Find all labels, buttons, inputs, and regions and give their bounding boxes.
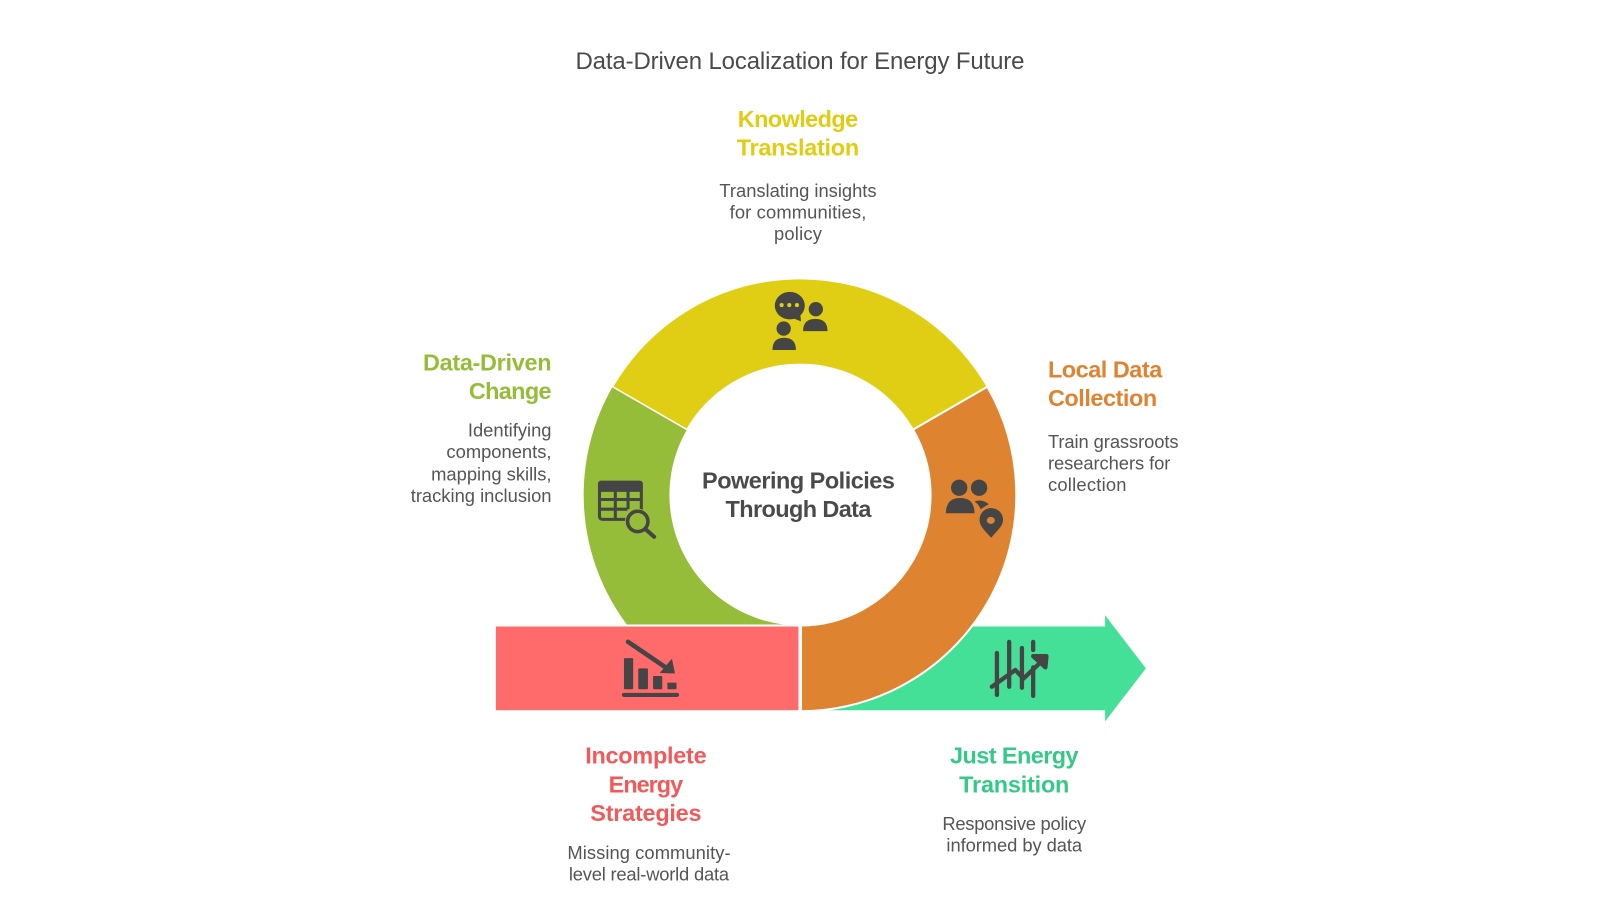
text: just energy transition (942, 742, 1087, 856)
text: incomplete energy strategies: Incomplete (585, 742, 707, 768)
text: local data collection (1048, 357, 1179, 495)
text: knowledge translation (719, 106, 877, 244)
text: just energy transition: Just Energy (950, 742, 1079, 768)
icon: table with magnifier (598, 481, 654, 537)
icon: rising chart (992, 642, 1046, 696)
text: local data collection: collection (1048, 474, 1127, 495)
ring segment: data-driven change (584, 387, 800, 711)
title: Data-Driven Localization for Energy Future (576, 48, 1024, 75)
text: just energy transition: Responsive policy (942, 813, 1087, 834)
text: data-driven change: Identifying (468, 420, 552, 441)
bar: incomplete energy strategies (449, 624, 801, 716)
text: incomplete energy strategies: Missing community- (567, 842, 731, 863)
text: just energy transition: informed by data (946, 835, 1083, 856)
text: just energy transition: Transition (959, 771, 1069, 797)
center label: Powering Policies (702, 467, 895, 493)
icon: people with location pin (946, 480, 1003, 538)
text: local data collection: researchers for (1048, 452, 1170, 473)
text: incomplete energy strategies: Energy (609, 771, 683, 797)
text: data-driven change (411, 349, 552, 506)
text: local data collection: Train grassroots (1048, 431, 1179, 452)
text: incomplete energy strategies: Strategies (590, 800, 702, 826)
text: data-driven change: Change (469, 378, 552, 404)
text: data-driven change: tracking inclusion (411, 485, 552, 506)
text: knowledge translation: Translation (737, 135, 859, 161)
arrow: just energy transition (802, 615, 1146, 721)
text: local data collection: Local Data (1048, 357, 1163, 383)
ring segment: knowledge translation (613, 279, 987, 430)
text: knowledge translation: Translating insights (719, 180, 877, 201)
icon: people talking (772, 292, 828, 350)
center label: Through Data (726, 496, 872, 522)
text: data-driven change: Data-Driven (423, 349, 552, 375)
text: knowledge translation: Knowledge (738, 106, 858, 132)
text: incomplete energy strategies: level real-world data (569, 864, 730, 885)
text: knowledge translation: for communities, (730, 201, 866, 222)
text: knowledge translation: policy (774, 223, 823, 244)
text: incomplete energy strategies (567, 742, 731, 885)
ring segment: local data collection (801, 387, 1016, 711)
text: local data collection: Collection (1048, 385, 1157, 411)
icon: declining bar chart (622, 642, 679, 697)
center label (702, 467, 895, 522)
text: data-driven change: components, (446, 441, 552, 462)
text: data-driven change: mapping skills, (431, 464, 552, 485)
